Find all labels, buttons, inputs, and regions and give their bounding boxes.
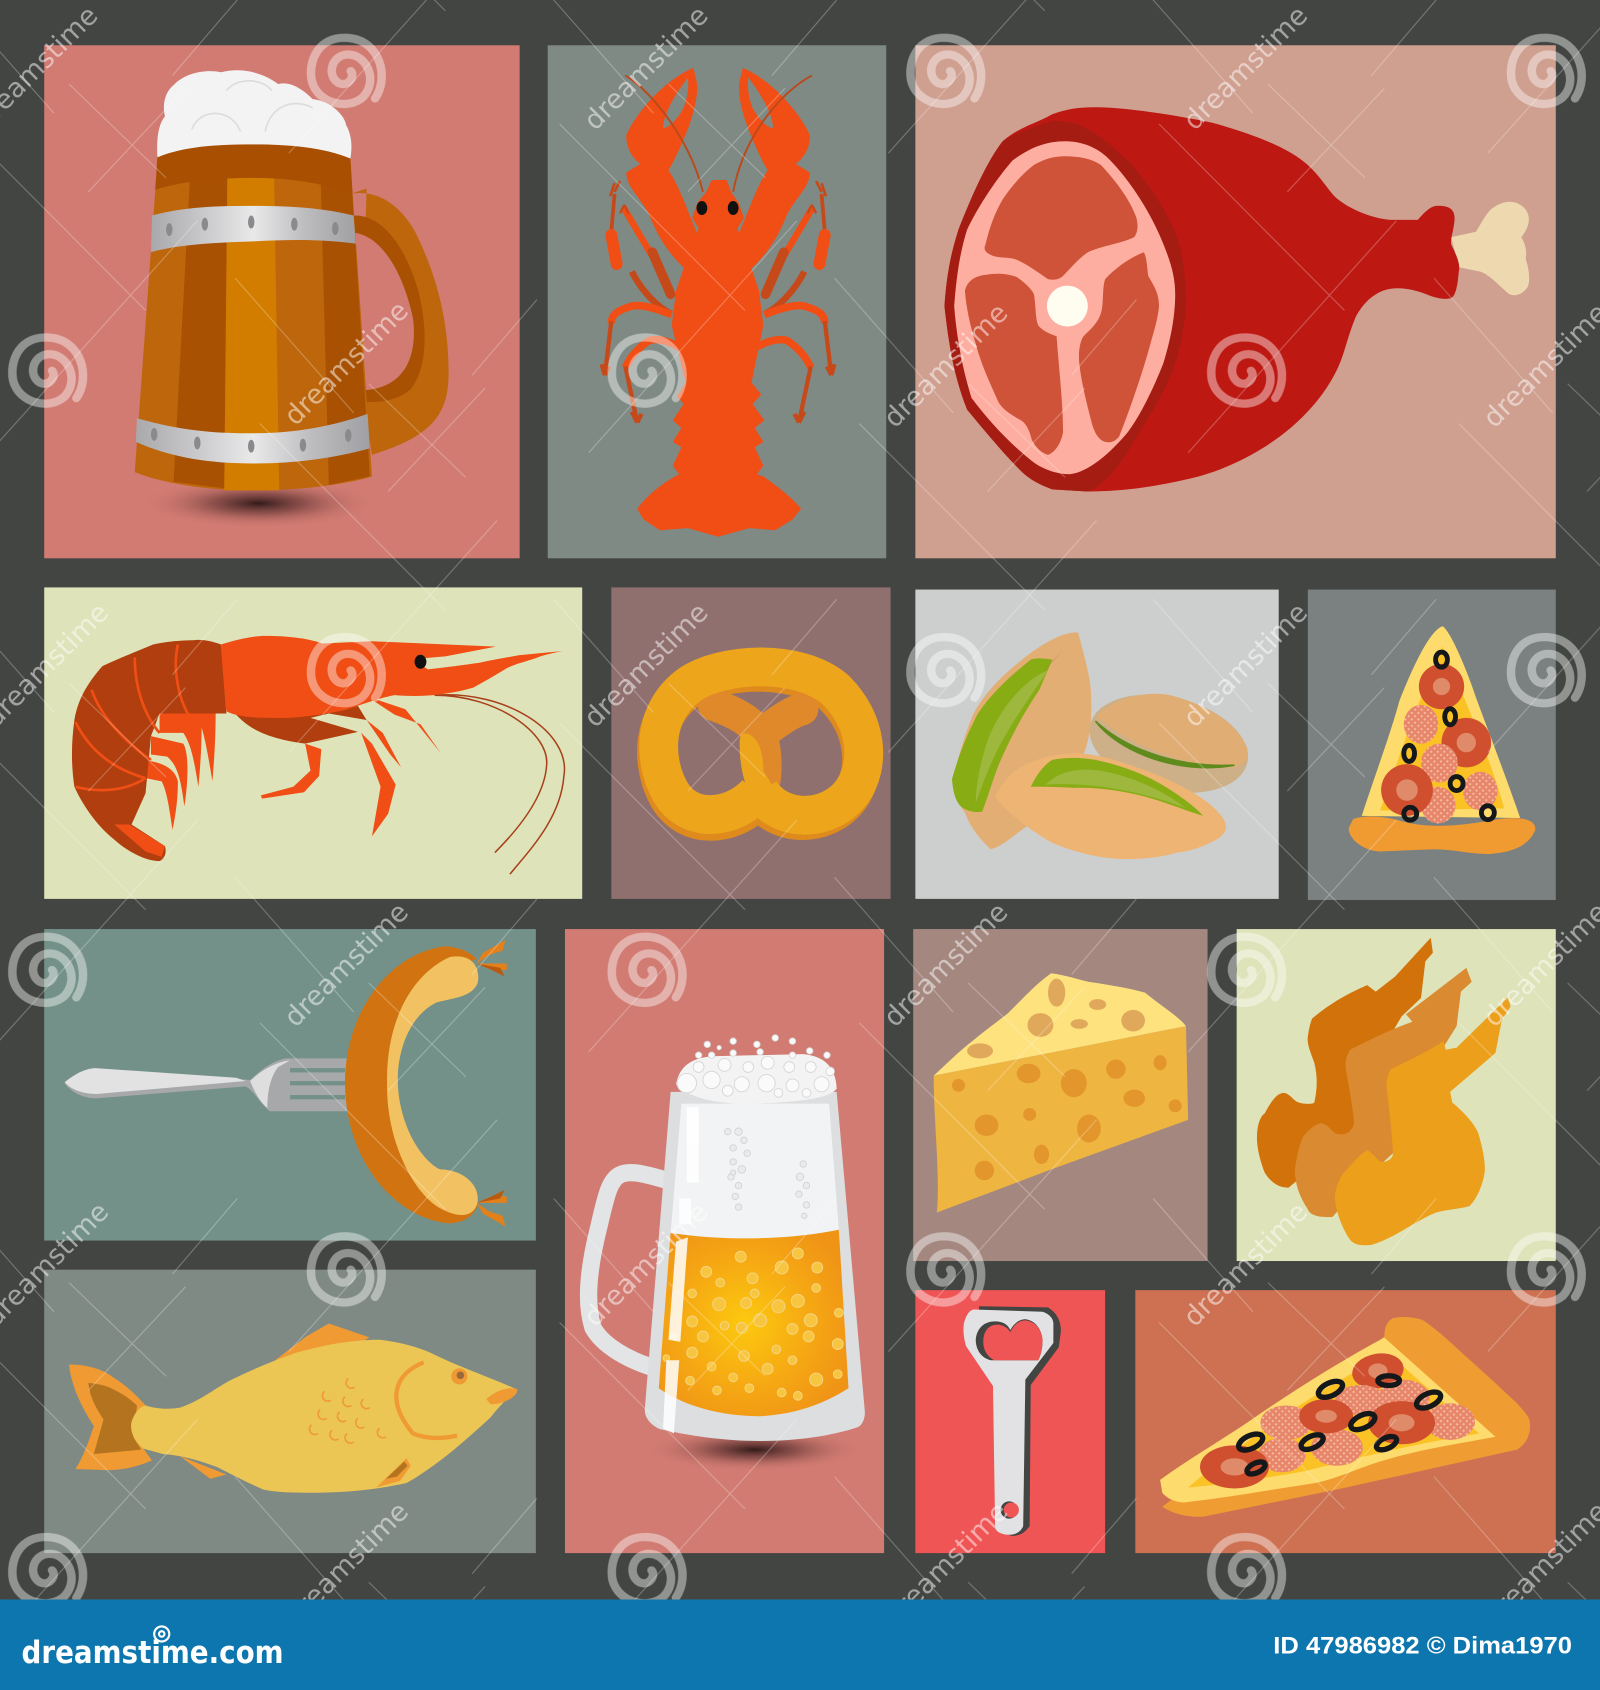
- cheese side holes: [952, 1055, 1182, 1180]
- pistachio front: [995, 753, 1226, 859]
- watermark: dreamstime text: dreamstime: [578, 597, 715, 734]
- opener shadow: [979, 1306, 1061, 1536]
- fish body: [131, 1340, 516, 1493]
- opener body: [963, 1310, 1053, 1535]
- watermark: dreamstime text: dreamstime: [1178, 597, 1314, 734]
- panel: roast chicken: [1237, 929, 1556, 1261]
- olives: [1236, 1376, 1443, 1476]
- glass shadow: [647, 1428, 863, 1471]
- pizza cheese: [1160, 1338, 1495, 1502]
- ham bone: [1451, 202, 1529, 295]
- cheese top: [934, 973, 1186, 1076]
- panel: pizza slice upright: [1308, 590, 1556, 900]
- glass highlights: [679, 1107, 699, 1224]
- fish tail inner: [88, 1383, 141, 1454]
- watermark: dreamstime text: dreamstime: [278, 295, 415, 432]
- pretzel shadow: [656, 672, 862, 821]
- pretzel centre strand: [740, 734, 783, 803]
- fish details: [309, 1362, 457, 1443]
- mug body: [135, 144, 372, 490]
- panel: pretzel: [611, 587, 891, 899]
- pizza crust: [1162, 1317, 1530, 1517]
- opener heart hole: [976, 1319, 1043, 1360]
- condensation bubbles: [725, 1128, 810, 1218]
- shrimp eye: [415, 655, 426, 669]
- watermark: dreamstime text: dreamstime: [578, 1197, 715, 1333]
- pepperoni: [1381, 664, 1498, 823]
- pizza cheese: [1362, 626, 1520, 818]
- watermark: dreamstime text: dreamstime: [278, 1496, 415, 1632]
- glass body: [645, 1092, 865, 1441]
- shrimp head and thorax: [221, 636, 563, 718]
- pistachio left: [952, 632, 1091, 849]
- panel: pistachios: [915, 590, 1279, 899]
- watermark: dreamstime text: dreamstime: [578, 0, 715, 136]
- glass highlight over beer: [663, 1237, 688, 1433]
- sausage: [345, 940, 507, 1227]
- footer logo text: dreamstime.com: [22, 1635, 284, 1671]
- beer liquid: [659, 1230, 849, 1416]
- cheese side: [934, 1026, 1188, 1213]
- chicken middle layer: [1295, 968, 1472, 1217]
- crayfish eyes: [696, 201, 739, 215]
- watermark: dreamstime text: dreamstime: [278, 897, 415, 1033]
- fork: [65, 1058, 347, 1111]
- pepperoni: [1200, 1349, 1475, 1488]
- ham outer: [944, 107, 1459, 491]
- pistachio back: [1079, 679, 1258, 808]
- mug foam: [157, 70, 351, 158]
- footer bar: [0, 1599, 1600, 1690]
- fish fins: [69, 1324, 370, 1479]
- cheese top holes: [967, 979, 1145, 1058]
- panel: ham: [915, 45, 1556, 558]
- olives: [1404, 652, 1494, 820]
- panel: bottle opener: [915, 1290, 1105, 1553]
- beer foam: [676, 1035, 837, 1104]
- footer logo spiral: [154, 1626, 169, 1641]
- watermark: dreamstime text: dreamstime: [1178, 0, 1314, 136]
- watermark: dreamstime text: dreamstime: [878, 897, 1014, 1033]
- fish eye and mouth: [376, 1368, 518, 1487]
- panel: sausage on fork: [44, 929, 536, 1241]
- panel: wooden beer mug: [44, 45, 520, 558]
- chicken front layer: [1335, 997, 1511, 1245]
- shrimp tail section: [72, 640, 226, 861]
- shrimp dark underside legs: [235, 706, 367, 744]
- shrimp swimmerets: [146, 714, 216, 830]
- pretzel ring: [659, 667, 864, 815]
- shrimp walking legs: [261, 696, 441, 836]
- glass handle: [589, 1173, 671, 1367]
- pretzel arms: [714, 705, 802, 785]
- panel: shrimp: [44, 587, 582, 899]
- panel: crayfish: [548, 45, 886, 558]
- watermark: dreamstime text: dreamstime: [1178, 1197, 1314, 1333]
- panel: cheese: [913, 929, 1208, 1261]
- crayfish claws and legs: [602, 68, 835, 422]
- watermark: dreamstime text: dreamstime: [878, 298, 1014, 434]
- opener small hole: [1001, 1501, 1019, 1519]
- watermark: dreamstime text: dreamstime: [878, 1496, 1014, 1632]
- crayfish antennae: [625, 75, 812, 192]
- ham lobes: [965, 156, 1159, 455]
- chicken back layer: [1257, 938, 1433, 1188]
- mug shadow: [142, 479, 375, 528]
- panel: glass beer mug: [565, 929, 884, 1553]
- pizza crust: [1349, 816, 1535, 854]
- panel: fish: [44, 1270, 536, 1553]
- panel: pizza slice diagonal: [1135, 1290, 1556, 1553]
- crayfish body: [637, 180, 801, 537]
- beer bubbles: [663, 1248, 843, 1400]
- ham cross-section fat: [954, 141, 1175, 474]
- shrimp antennae: [435, 695, 564, 874]
- footer image id: ID 47986982 © Dima1970: [1273, 1633, 1572, 1659]
- ham rim: [944, 121, 1186, 491]
- ham bone centre: [1047, 286, 1088, 327]
- mug handle: [350, 189, 449, 455]
